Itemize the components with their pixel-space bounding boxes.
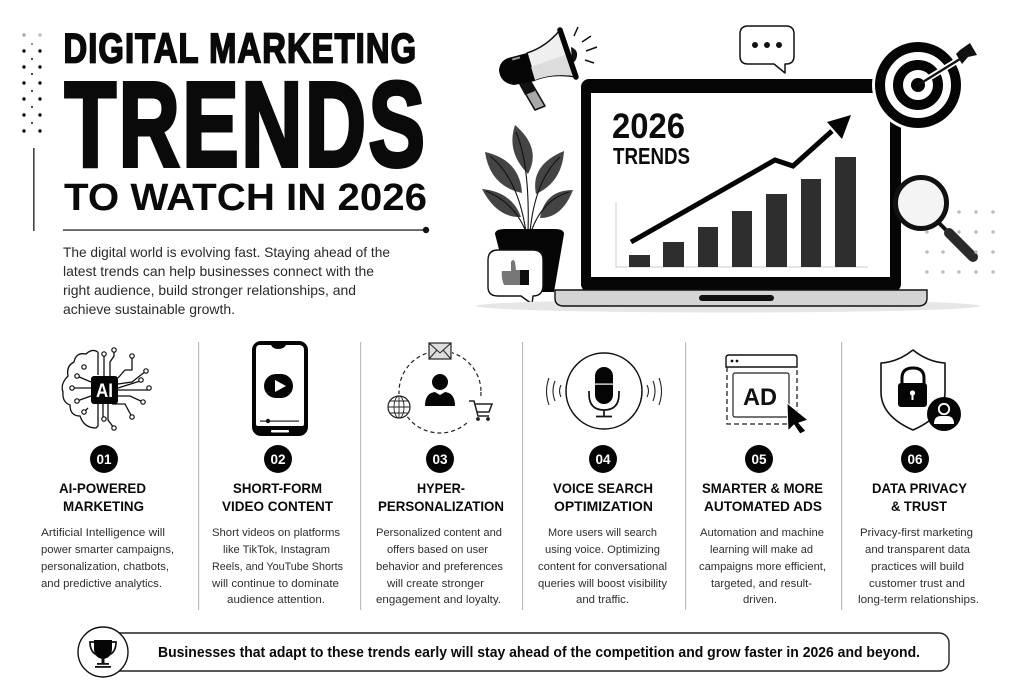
number badge 06: 06 [907,452,923,467]
title rule [63,227,429,233]
body text: learning will make ad [710,544,813,556]
number badge 03: 03 [432,452,448,467]
screen heading: 2026 [612,107,685,146]
icon: thumbs up bubble [488,250,543,304]
icon: magnifying glass [896,178,973,257]
intro paragraph: The digital world is evolving fast. Staying ahead of the [63,244,390,260]
heading [378,480,504,514]
intro paragraph: achieve sustainable growth. [63,301,235,317]
number badge 03 [426,445,454,473]
heading: HYPER- [417,480,465,496]
number badge 01 [90,445,118,473]
intro paragraph [63,244,390,317]
intro paragraph: latest trends can help businesses connect with the [63,263,374,279]
body text [538,527,667,606]
callout banner [78,627,949,677]
number badge 06 [901,445,929,473]
body text: offers based on user [387,544,488,556]
number badge 05 [745,445,773,473]
icon: target with arrow [872,39,977,131]
number badge 04: 04 [595,452,611,467]
heading [59,480,146,514]
title: TO WATCH IN 2026 [64,177,427,219]
body text: like TikTok, Instagram [223,544,330,556]
title [64,25,427,219]
number badge 02: 02 [270,452,286,467]
number badge 05: 05 [751,452,767,467]
body text: audience attention. [227,594,325,606]
icon: AI brain: AI [96,381,113,402]
plant pot [495,229,564,292]
body text: Privacy-first marketing [860,527,973,539]
title: DIGITAL MARKETING [64,25,416,71]
icon: phone with play button [252,341,308,436]
body text: campaigns more efficient, [699,561,826,573]
heading: SHORT-FORM [233,480,322,496]
body text: Automation and machine [700,527,824,539]
body text [211,527,343,606]
intro paragraph: right audience, build stronger relationships, and [63,282,356,298]
body text [41,527,174,590]
heading: AI-POWERED [59,480,146,496]
heading [222,480,333,514]
icon: AI brain [62,348,151,430]
body text: Artificial Intelligence will [41,527,165,539]
body text: targeted, and result- [711,578,812,590]
body text: customer trust and [869,578,965,590]
heading [872,480,968,514]
number badge 01: 01 [96,452,112,467]
number badge 02 [264,445,292,473]
body text: personalization, chatbots, [41,561,169,573]
icon: megaphone [499,27,597,110]
panel: AI-powered marketing [41,348,174,590]
body text: behavior and preferences [376,561,503,573]
screen heading: TRENDS [613,143,690,169]
icon: person with channels [386,342,493,433]
heading: PERSONALIZATION [378,498,504,514]
body text: and traffic. [576,594,629,606]
heading: DATA PRIVACY [872,480,968,496]
icon: microphone [546,353,662,429]
column dividers [198,342,842,610]
body text: long-term relationships. [858,594,979,606]
heading: & TRUST [891,498,947,514]
shadow under laptop [476,300,980,312]
body text: content for conversational [538,561,667,573]
heading: AUTOMATED ADS [704,498,822,514]
body text: Personalized content and [376,527,502,539]
number badge 04 [589,445,617,473]
heading: SMARTER & MORE [702,480,823,496]
screen heading [612,107,690,169]
heading: OPTIMIZATION [554,498,653,514]
body text: power smarter campaigns, [41,544,174,556]
body text: will create stronger [386,578,484,590]
icon: shield with lock and user [881,350,961,431]
body text: More users will search [548,527,657,539]
body text: using voice. Optimizing [545,544,660,556]
panel: data privacy [858,350,979,606]
heading [553,480,653,514]
body text: Reels, and YouTube Shorts [212,561,343,573]
arrow: growth trend [631,115,851,242]
body text: Short videos on platforms [212,527,340,539]
laptop [555,79,927,306]
icon: ad window with cursor [726,355,808,434]
icon: trophy [78,627,128,677]
panel: short-form video [211,341,343,606]
body text: and predictive analytics. [41,578,162,590]
body text: queries will boost visibility [538,578,667,590]
body text: will continue to dominate [211,578,339,590]
heading [702,480,823,514]
panel: voice search [538,353,667,606]
heading: MARKETING [63,498,144,514]
heading: VIDEO CONTENT [222,498,333,514]
body text: practices will build [871,561,964,573]
decorative dots right [925,210,995,274]
icon: plant [482,125,573,292]
laptop base [555,290,927,306]
body text [376,527,503,606]
body text: engagement and loyalty. [376,594,501,606]
callout banner: Businesses that adapt to these trends early will stay ahead of the competition and grow faster in 2026 and beyond. [158,645,920,661]
heading: VOICE SEARCH [553,480,653,496]
panel: automated ads [699,355,826,606]
decorative dot column [22,33,42,231]
body text [858,527,979,606]
icon: ad window with cursor: AD [743,384,777,411]
title: TRENDS [64,57,425,193]
bar chart [616,157,868,267]
panel: hyper-personalization [376,342,504,606]
body text: driven. [743,594,777,606]
body text: and transparent data [865,544,971,556]
icon: speech bubble [740,26,794,73]
body text [699,527,826,606]
